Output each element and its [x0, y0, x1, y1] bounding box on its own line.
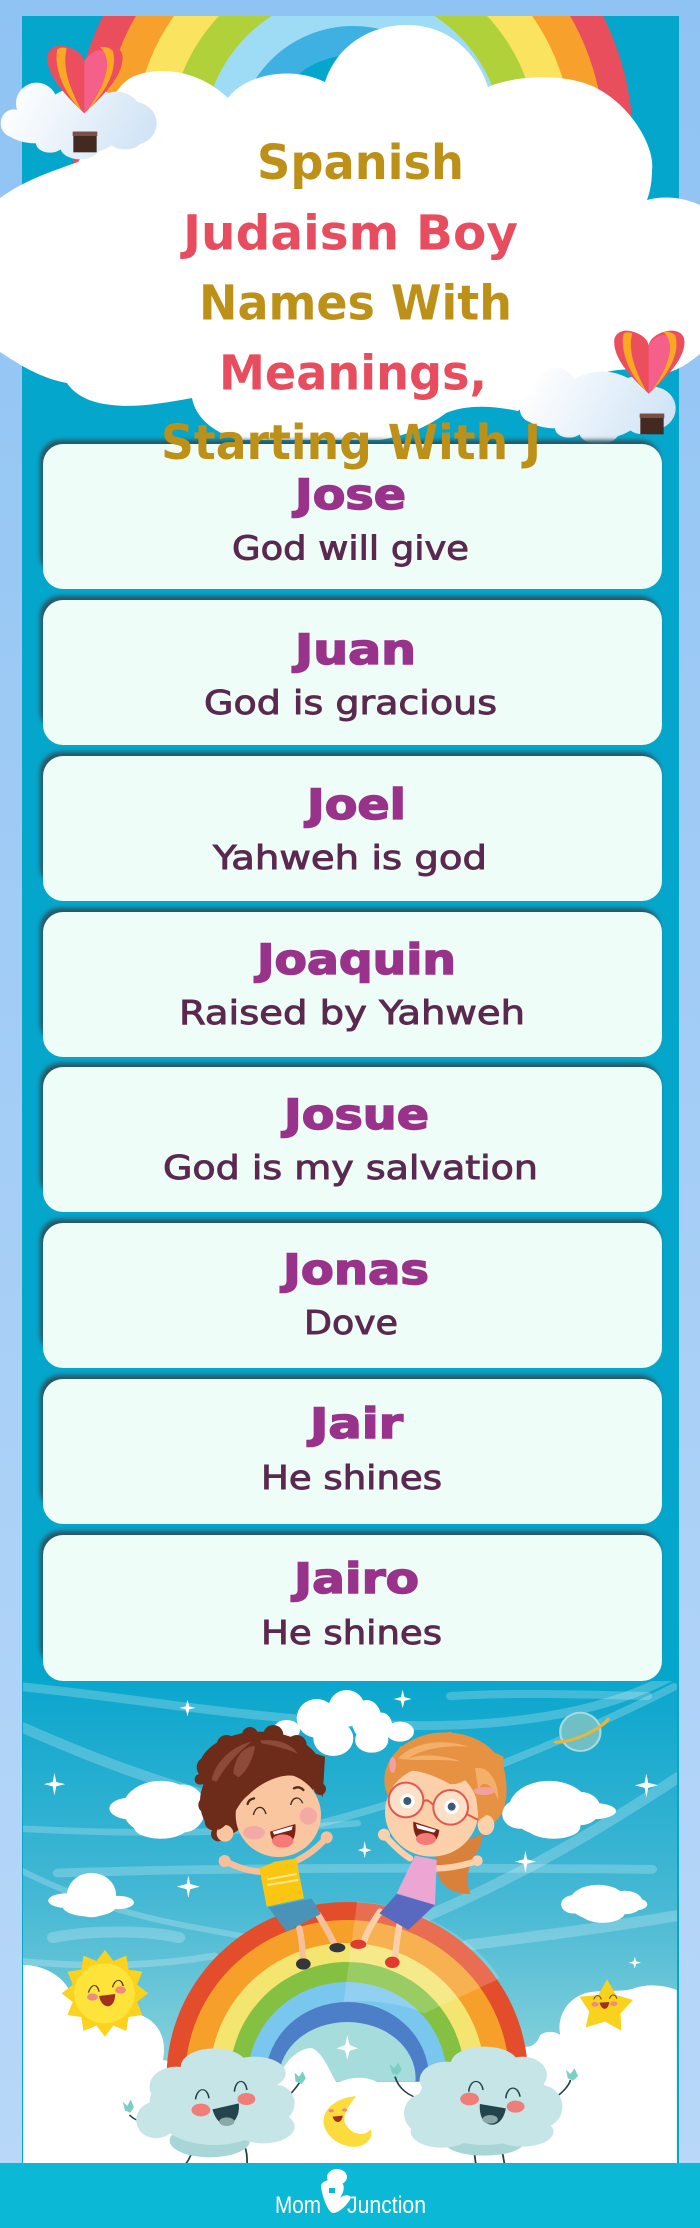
boy shorts: [268, 1898, 321, 1932]
card: Jose: [40, 440, 662, 589]
MomJunction logo: [275, 2169, 426, 2219]
rainbow: [166, 1902, 527, 2082]
card: Josue: Josue: [281, 1090, 429, 1139]
footer bar: [0, 2163, 700, 2228]
sparkles: [44, 1690, 658, 1898]
girl hair clips: [389, 1757, 396, 1773]
card: Jair: He shines: [261, 1458, 442, 1497]
card: Joel: Joel: [304, 780, 406, 829]
title: Names With: [199, 276, 512, 332]
title cloud: [0, 25, 700, 440]
small white clouds: [48, 1781, 647, 1923]
boy cheeks: [243, 1826, 265, 1839]
girl eyes: [400, 1794, 415, 1808]
boy hair fringe: [218, 1754, 325, 1830]
logo text: Mom: [275, 2192, 321, 2219]
boy face: [236, 1773, 321, 1857]
title: [161, 135, 541, 471]
girl mouth: [413, 1822, 439, 1844]
bottom scene: [23, 1681, 677, 2163]
boy: [195, 1725, 345, 1970]
first card text: God will give: [232, 528, 469, 568]
card: Jairo: Jairo: [291, 1554, 419, 1603]
boy eyes: [253, 1798, 303, 1815]
card: Joaquin: Raised by Yahweh: [179, 993, 525, 1032]
planet: [556, 1713, 608, 1751]
card: Jairo: [40, 1531, 662, 1681]
card: Jair: Jair: [306, 1399, 403, 1448]
card: Jairo: He shines: [261, 1613, 442, 1652]
left balloon and cloud: [1, 46, 157, 159]
wisps: [22, 1672, 679, 1965]
boy limbs: [226, 1839, 334, 1958]
sun: [62, 1950, 148, 2037]
girl fringe: [384, 1732, 503, 1821]
girl skirt: [379, 1894, 435, 1930]
card: Jonas: Jonas: [280, 1245, 429, 1294]
girl back hair: [436, 1833, 483, 1894]
white cloud ground: [23, 1965, 677, 2167]
card: Joel: [40, 752, 662, 901]
girl top: [397, 1856, 437, 1905]
girl limbs: [364, 1836, 478, 1958]
girl glasses: [389, 1783, 468, 1825]
right cloud: [502, 1781, 616, 1839]
left heart balloon: [47, 46, 123, 113]
lower scene: [23, 1902, 677, 2163]
boy hair back: [195, 1725, 326, 1841]
boy shirt: [259, 1858, 304, 1907]
card: Jonas: [40, 1219, 662, 1368]
boy mouth: [270, 1824, 296, 1840]
small sparkle: [629, 1957, 641, 1969]
upper sky details: [22, 1672, 679, 1965]
mid right cloud: [561, 1885, 647, 1923]
star: [579, 1979, 633, 2031]
right smiling cloud: [390, 2047, 578, 2164]
girl hair: [384, 1732, 506, 1828]
card: Juan: [40, 596, 662, 745]
first card text: [232, 470, 469, 568]
children group: [177, 1690, 507, 1970]
left smiling cloud: [123, 2048, 306, 2164]
card: Josue: [40, 1063, 662, 1212]
small left cloud: [1, 83, 157, 159]
title: Spanish: [257, 135, 464, 191]
big sparkle: [337, 2035, 358, 2060]
girl face: [385, 1767, 478, 1857]
left balloon basket: [73, 132, 97, 152]
girl: [350, 1732, 507, 1968]
logo icon: [321, 2169, 351, 2213]
moon: [324, 2096, 372, 2147]
card: Juan: God is gracious: [204, 683, 497, 722]
title: Starting With J: [161, 415, 541, 471]
card: Joaquin: [40, 908, 662, 1057]
top rainbow: [74, 16, 632, 164]
inner arch clouds: [281, 2048, 420, 2082]
card: Jonas: Dove: [304, 1303, 398, 1342]
girl shoes: [350, 1940, 366, 1949]
card: Joaquin: Joaquin: [254, 935, 456, 984]
first card text: Jose: [292, 470, 406, 519]
left cloud: [109, 1781, 205, 1839]
card: Joel: Yahweh is god: [212, 838, 487, 877]
right balloon and cloud: [520, 331, 684, 444]
boy shoes: [329, 1943, 345, 1952]
small right cloud: [520, 368, 676, 444]
mid left cloud: [48, 1873, 134, 1917]
right balloon basket: [640, 414, 664, 434]
card: Juan: Juan: [292, 625, 416, 674]
extra sparkles: [177, 1876, 199, 1897]
card: Josue: God is my salvation: [163, 1148, 538, 1187]
sky: [23, 1681, 677, 2163]
card: Jair: [40, 1375, 662, 1524]
title: Judaism Boy: [180, 206, 518, 262]
right heart balloon: [614, 331, 684, 394]
title: Meanings,: [219, 346, 487, 402]
MomJunction logo: Junction: [347, 2192, 426, 2219]
top white cloud: [273, 1690, 414, 1756]
